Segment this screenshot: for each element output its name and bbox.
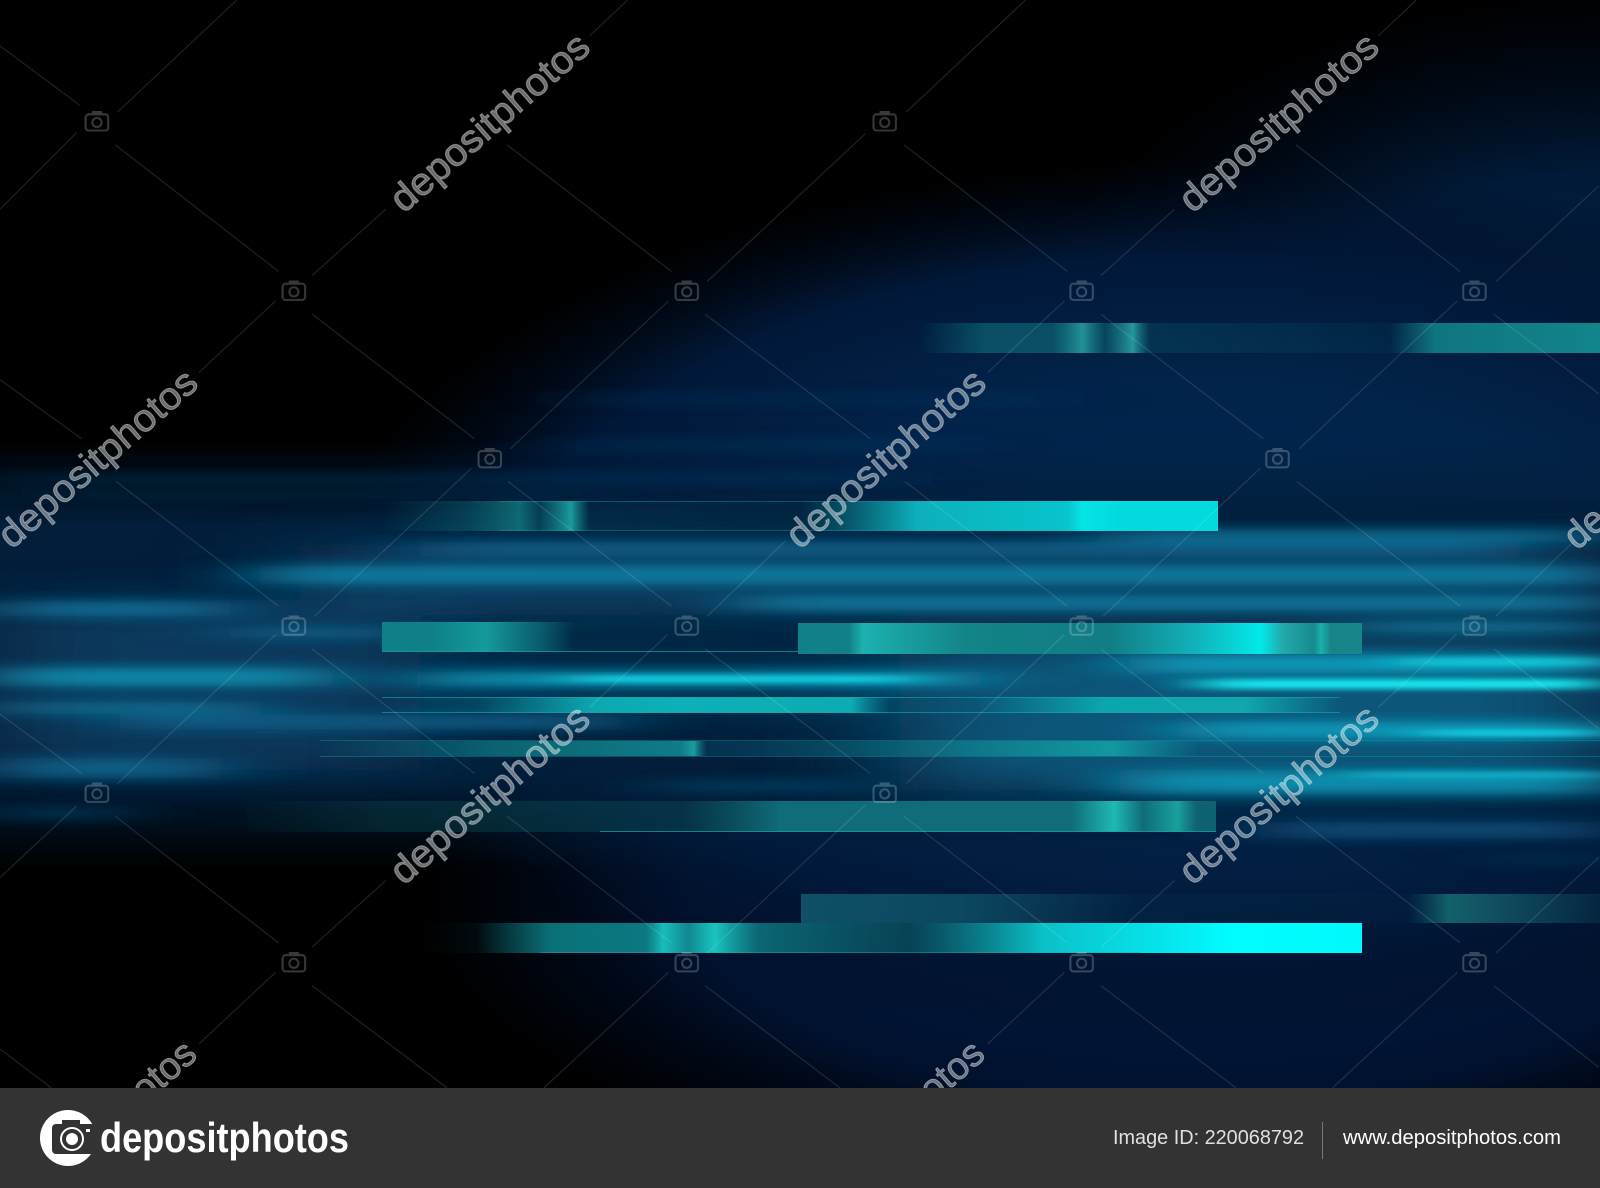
footer logotype: depositphotos [100,1114,349,1161]
light bar 8 [420,923,1362,953]
blurred light streaks [0,395,1600,862]
icon: depositphotos camera logo [40,1110,96,1166]
watermark text: otos [911,1032,993,1111]
watermark text: depositphotos [382,25,598,221]
light bar 3 left [382,622,800,652]
light bar 1 (top right) [850,323,1600,353]
watermark text: depositphotos [1171,25,1387,221]
watermark text: depositphotos [1171,697,1387,893]
watermark text: depositphotos [382,697,598,893]
light bar 7 [801,894,1600,923]
watermark text: depositphotos [778,361,994,557]
light bar 6 [247,801,1216,832]
footer bar [0,1088,1600,1188]
light bar 5 [320,740,1600,757]
watermark camera icons [86,111,1486,971]
light bar 4 [382,697,1340,713]
light bar 3 right [798,623,1362,654]
watermark text: otos [123,1032,205,1111]
light bar 2 [380,501,1218,531]
website url: www.depositphotos.com [1342,1127,1561,1149]
image id: Image ID: 220068792 [1113,1127,1304,1149]
